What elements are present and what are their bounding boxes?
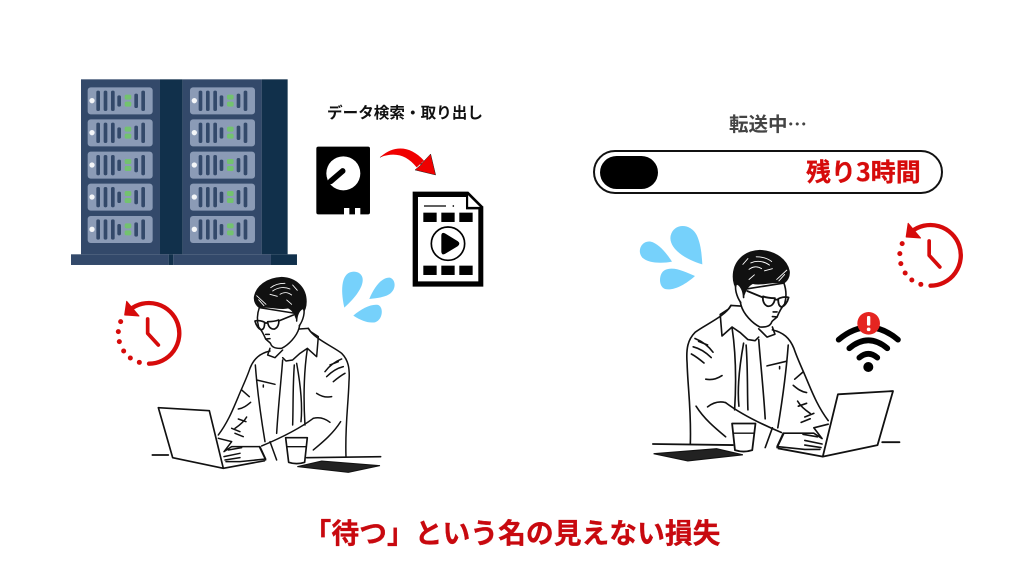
illustration: man at laptop left <box>152 278 381 472</box>
tablet right <box>654 449 743 461</box>
icon: hard disk <box>316 147 370 214</box>
arrow: disk to file <box>380 148 436 175</box>
laptop right <box>823 391 893 457</box>
title: 「待つ」という名の見えない損失 <box>304 512 721 552</box>
cup right <box>732 423 755 452</box>
table <box>152 455 381 458</box>
tablet <box>297 461 380 472</box>
status label: transferring: 転送中… <box>729 108 807 137</box>
icon: sweat drops right <box>640 226 702 289</box>
server units <box>88 87 255 243</box>
icon: history clock right <box>897 223 961 287</box>
icon: history clock left <box>116 301 179 365</box>
panel: server racks <box>71 79 297 265</box>
laptop <box>158 408 223 468</box>
remaining time text: 残り3時間 <box>806 153 921 189</box>
cup <box>286 438 307 464</box>
icon: sweat drops left <box>342 272 395 323</box>
illustration: man at laptop right <box>653 251 899 461</box>
icon: wifi warning <box>839 312 898 372</box>
progress bar <box>594 151 942 193</box>
rack bodies <box>71 79 297 265</box>
icon: video file <box>413 192 483 287</box>
heading: data search and retrieval: データ検索・取り出し <box>327 101 483 123</box>
table right <box>653 442 899 445</box>
